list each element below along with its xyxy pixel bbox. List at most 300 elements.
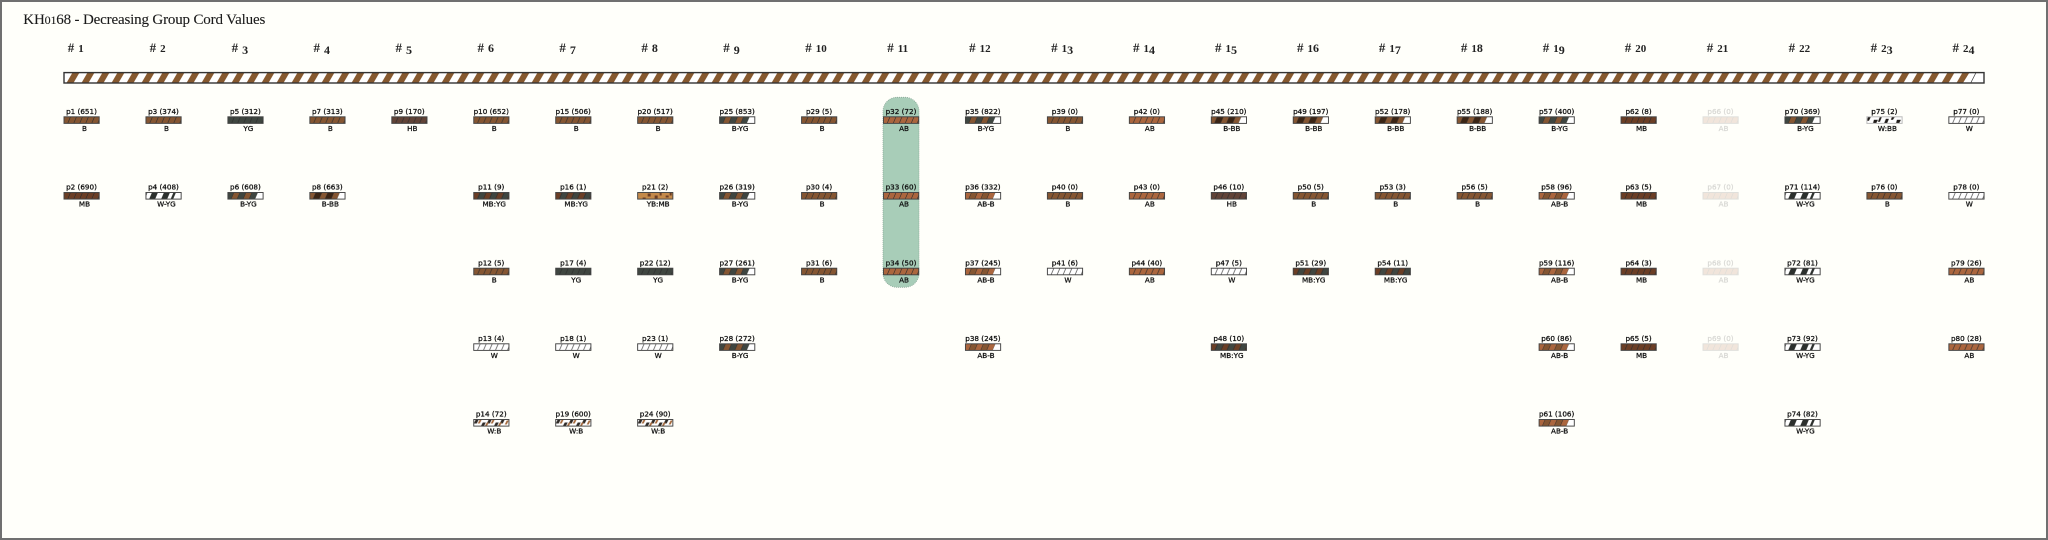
cord p51: p51 (29) xyxy=(1295,258,1326,267)
cord p51: MB:YG xyxy=(1302,275,1326,284)
cord p32: p32 (72) xyxy=(886,107,917,116)
cord p72: p72 (81) xyxy=(1787,258,1818,267)
cord p64 xyxy=(1621,258,1656,284)
cord p1: p1 (651) xyxy=(66,107,97,116)
cord p67: AB xyxy=(1719,200,1728,209)
cord p26 xyxy=(719,183,755,209)
cord p13: p13 (4) xyxy=(478,334,505,343)
cord p79: AB xyxy=(1964,275,1974,284)
cord p9 xyxy=(392,107,427,133)
cord p27 xyxy=(719,258,755,284)
cord p68: AB xyxy=(1719,275,1728,284)
cord p67: p67 (0) xyxy=(1707,183,1734,192)
cord p65: MB xyxy=(1636,351,1647,360)
cord p30 xyxy=(802,183,837,209)
column 6 cords xyxy=(474,107,509,436)
column 21 cords (faded) xyxy=(1703,107,1738,360)
cord p4: W-YG xyxy=(157,200,176,209)
cord p47: p47 (5) xyxy=(1216,258,1242,267)
cord p22: YG xyxy=(652,275,663,284)
cord p43: p43 (0) xyxy=(1134,183,1160,192)
cord p53: p53 (3) xyxy=(1380,183,1406,192)
heading 24: # 2 xyxy=(1953,40,1969,55)
cord p43: AB xyxy=(1145,200,1155,209)
cord p6: B-YG xyxy=(240,200,257,209)
heading 3: # xyxy=(232,40,238,55)
cord p62 xyxy=(1621,107,1656,133)
cord p41: W xyxy=(1064,275,1071,284)
cord p22: p22 (12) xyxy=(640,258,671,267)
cord p46: HB xyxy=(1227,200,1237,209)
cord p70: B-YG xyxy=(1797,124,1814,133)
heading 5: 5 xyxy=(406,43,412,57)
cord p58: p58 (96) xyxy=(1541,183,1572,192)
cord p23: p23 (1) xyxy=(642,334,668,343)
heading 14: 4 xyxy=(1149,43,1155,57)
cord p62: MB xyxy=(1636,124,1647,133)
cord p58: AB-B xyxy=(1551,200,1568,209)
heading 13: 3 xyxy=(1067,43,1073,57)
heading 3: 3 xyxy=(242,43,248,57)
cord p67 xyxy=(1703,183,1738,209)
heading 6: # 6 xyxy=(477,40,494,55)
cord p45: B-BB xyxy=(1223,124,1240,133)
cord p19 xyxy=(556,410,591,436)
cord p73 xyxy=(1785,334,1820,360)
cord p10: p10 (652) xyxy=(474,107,509,116)
column 20 cords xyxy=(1621,107,1656,360)
cord p27: p27 (261) xyxy=(719,258,755,267)
cord p15: p15 (506) xyxy=(556,107,591,116)
column 24 cords xyxy=(1949,107,1984,360)
cord p14 xyxy=(474,410,509,436)
cord p24: W:B xyxy=(651,427,665,436)
cord p42 xyxy=(1129,107,1165,133)
cord p57: B-YG xyxy=(1551,124,1568,133)
cord p44 xyxy=(1129,258,1165,284)
cord p77: p77 (0) xyxy=(1953,107,1980,116)
cord p71 xyxy=(1785,183,1820,209)
heading 7: 7 xyxy=(570,43,576,57)
cord p8 xyxy=(310,183,345,209)
heading 23: # 2 xyxy=(1871,40,1887,55)
cord p5: YG xyxy=(242,124,253,133)
cord p57 xyxy=(1539,107,1574,133)
column 13 cords xyxy=(1047,107,1083,284)
cord p55: p55 (188) xyxy=(1457,107,1493,116)
column 18 cords xyxy=(1457,107,1493,209)
heading 16: # 16 xyxy=(1297,40,1319,55)
cord p24 xyxy=(638,410,673,436)
cord p53 xyxy=(1375,183,1410,209)
cord p2: p2 (690) xyxy=(66,183,97,192)
title: KH0168 - Decreasing Group Cord Values xyxy=(23,12,265,28)
heading 23: 3 xyxy=(1887,43,1893,57)
cord p46 xyxy=(1211,183,1246,209)
heading 15: # 1 xyxy=(1215,40,1231,55)
cord p50: B xyxy=(1311,200,1316,209)
cord p26: p26 (319) xyxy=(719,183,755,192)
cord p25: B-YG xyxy=(732,124,748,133)
cord p53: B xyxy=(1393,200,1398,209)
cord p38 xyxy=(965,334,1001,360)
cord p60: AB-B xyxy=(1551,351,1568,360)
cord p44: p44 (40) xyxy=(1131,258,1162,267)
cord p8: B-BB xyxy=(322,200,339,209)
cord p79: p79 (26) xyxy=(1951,258,1982,267)
cord p8: p8 (663) xyxy=(312,183,343,192)
cord p12: B xyxy=(492,275,497,284)
cord p23 xyxy=(638,334,673,360)
cord p4: p4 (408) xyxy=(148,183,179,192)
cord p21 xyxy=(638,183,673,209)
cord p11: p11 (9) xyxy=(478,183,505,192)
cord p33: p33 (60) xyxy=(886,183,917,192)
heading 9: # xyxy=(723,40,730,55)
cord p11 xyxy=(474,183,509,209)
cord p41 xyxy=(1047,258,1083,284)
cord p27: B-YG xyxy=(732,275,748,284)
cord p54 xyxy=(1375,258,1410,284)
cord p16: MB:YG xyxy=(564,200,588,209)
cord p76: B xyxy=(1885,200,1890,209)
cord p36 xyxy=(965,183,1001,209)
cord p65: p65 (5) xyxy=(1625,334,1652,343)
heading 5: # xyxy=(396,40,402,55)
cord p68 xyxy=(1703,258,1738,284)
cord p16 xyxy=(556,183,591,209)
cord p63: MB xyxy=(1636,200,1647,209)
heading 4: # xyxy=(314,40,320,55)
column 4 cords xyxy=(310,107,345,209)
cord p29: B xyxy=(820,124,825,133)
cord p18 xyxy=(556,334,591,360)
column 7 cords xyxy=(556,107,591,436)
cord p73: W-YG xyxy=(1796,351,1815,360)
cord p37: p37 (245) xyxy=(965,258,1001,267)
cord p11: MB:YG xyxy=(482,200,506,209)
cord p59: AB-B xyxy=(1551,275,1568,284)
cord p80: AB xyxy=(1964,351,1974,360)
cord p33 xyxy=(884,183,919,209)
cord p36: p36 (332) xyxy=(965,183,1001,192)
cord p24: p24 (90) xyxy=(640,410,671,419)
cord p20: p20 (517) xyxy=(637,107,673,116)
cord p36: AB-B xyxy=(977,200,995,209)
cord p63 xyxy=(1621,183,1656,209)
heading 11: # 11 xyxy=(887,40,908,55)
cord p18: p18 (1) xyxy=(560,334,586,343)
heading 7: # xyxy=(559,40,566,55)
cord p14: p14 (72) xyxy=(476,410,507,419)
cord p75 xyxy=(1867,107,1902,133)
cord p50 xyxy=(1293,183,1328,209)
cord p13: W xyxy=(491,351,498,360)
cord p65 xyxy=(1621,334,1656,360)
cord p78: p78 (0) xyxy=(1953,183,1980,192)
cord p60: p60 (86) xyxy=(1541,334,1572,343)
cord p80: p80 (28) xyxy=(1951,334,1982,343)
cord p25 xyxy=(719,107,755,133)
cord p73: p73 (92) xyxy=(1787,334,1818,343)
cord p39 xyxy=(1047,107,1083,133)
cord p7: B xyxy=(328,124,333,133)
cord p29 xyxy=(802,107,837,133)
cord p39: B xyxy=(1065,124,1070,133)
cord p64: MB xyxy=(1636,275,1647,284)
heading 13: # 1 xyxy=(1051,40,1067,55)
cord p13 xyxy=(474,334,509,360)
cord p17: p17 (4) xyxy=(560,258,586,267)
cord p59: p59 (116) xyxy=(1539,258,1574,267)
cord p22 xyxy=(638,258,673,284)
heading 1: # 1 xyxy=(68,40,84,55)
cord p18: W xyxy=(573,351,580,360)
cord p70 xyxy=(1785,107,1820,133)
cord p35 xyxy=(965,107,1001,133)
cord p49: p49 (197) xyxy=(1293,107,1329,116)
cord p14: W:B xyxy=(487,427,501,436)
cord p79 xyxy=(1949,258,1984,284)
cord p12: p12 (5) xyxy=(478,258,505,267)
cord p29: p29 (5) xyxy=(806,107,832,116)
column headings xyxy=(68,40,1975,57)
heading 18: # 18 xyxy=(1461,40,1483,55)
cord p59 xyxy=(1539,258,1574,284)
cord p51 xyxy=(1293,258,1328,284)
cord p34 xyxy=(884,258,919,284)
cord p52: B-BB xyxy=(1387,124,1404,133)
cord p15 xyxy=(556,107,591,133)
heading 8: # 8 xyxy=(641,40,658,55)
cord p42: AB xyxy=(1145,124,1155,133)
cord p35: p35 (822) xyxy=(965,107,1001,116)
cord p76: p76 (0) xyxy=(1871,183,1898,192)
cord p77 xyxy=(1949,107,1984,133)
cord p62: p62 (8) xyxy=(1625,107,1652,116)
cord p34: p34 (50) xyxy=(886,258,917,267)
cord p7: p7 (313) xyxy=(312,107,343,116)
cord p66 xyxy=(1703,107,1738,133)
cord p75: p75 (2) xyxy=(1871,107,1898,116)
cord p10: B xyxy=(492,124,497,133)
cord p68: p68 (0) xyxy=(1707,258,1734,267)
cord p48 xyxy=(1211,334,1246,360)
cord p80 xyxy=(1949,334,1984,360)
cord p34: AB xyxy=(899,275,909,284)
column 1 cords xyxy=(64,107,99,209)
cord p48: p48 (10) xyxy=(1213,334,1244,343)
cord p56 xyxy=(1457,183,1492,209)
cord p61 xyxy=(1539,410,1574,436)
cord p45: p45 (210) xyxy=(1211,107,1247,116)
column 9 cords xyxy=(719,107,755,360)
cord p56: B xyxy=(1475,200,1480,209)
heading 17: 7 xyxy=(1395,43,1401,57)
cord p30: p30 (4) xyxy=(806,183,832,192)
column 17 cords xyxy=(1375,107,1411,284)
cord p74: W-YG xyxy=(1796,427,1815,436)
cord p5 xyxy=(228,107,263,133)
heading 19: 9 xyxy=(1559,43,1565,57)
cord p74: p74 (82) xyxy=(1787,410,1818,419)
cord p40 xyxy=(1047,183,1083,209)
cord p40: B xyxy=(1065,200,1070,209)
cord p32 xyxy=(884,107,919,133)
cord p19: p19 (600) xyxy=(556,410,591,419)
cord p54: MB:YG xyxy=(1384,275,1407,284)
cord p3: B xyxy=(164,124,169,133)
column 8 cords xyxy=(637,107,673,436)
cord p28 xyxy=(719,334,755,360)
heading 22: # 22 xyxy=(1789,40,1811,55)
cord p31: p31 (6) xyxy=(806,258,832,267)
cord p12 xyxy=(474,258,509,284)
cord p1: B xyxy=(82,124,87,133)
cord p30: B xyxy=(820,200,825,209)
cord p48: MB:YG xyxy=(1220,351,1244,360)
column 11 cords xyxy=(884,107,919,284)
cord p66: AB xyxy=(1719,124,1728,133)
cord p54: p54 (11) xyxy=(1377,258,1408,267)
cord p28: B-YG xyxy=(732,351,748,360)
cord p61: p61 (106) xyxy=(1539,410,1574,419)
heading 20: # 20 xyxy=(1625,40,1647,55)
cord p21: p21 (2) xyxy=(642,183,668,192)
cord p72: W-YG xyxy=(1796,275,1815,284)
heading 2: # 2 xyxy=(150,40,166,55)
cord p31 xyxy=(802,258,837,284)
cord p2 xyxy=(64,183,99,209)
cord p77: W xyxy=(1966,124,1973,133)
cord p78: W xyxy=(1966,200,1973,209)
cord p52: p52 (178) xyxy=(1375,107,1411,116)
cord p69: AB xyxy=(1719,351,1728,360)
cord p4 xyxy=(146,183,181,209)
column 5 cords xyxy=(392,107,427,133)
heading 4: 4 xyxy=(324,43,330,57)
cord p55: B-BB xyxy=(1469,124,1486,133)
cord p56: p56 (5) xyxy=(1462,183,1488,192)
cord p9: p9 (170) xyxy=(394,107,425,116)
cord p64: p64 (3) xyxy=(1625,258,1652,267)
column 12 cords xyxy=(965,107,1001,360)
cord p49: B-BB xyxy=(1305,124,1322,133)
heading 14: # 1 xyxy=(1133,40,1149,55)
cord p47: W xyxy=(1228,275,1235,284)
cord p1 xyxy=(64,107,99,133)
cord p44: AB xyxy=(1145,275,1155,284)
main cord bar xyxy=(64,73,1984,83)
cord p35: B-YG xyxy=(978,124,994,133)
column 22 cords xyxy=(1785,107,1820,436)
cord p32: AB xyxy=(899,124,909,133)
cord p20: B xyxy=(656,124,661,133)
heading 24: 4 xyxy=(1969,43,1975,57)
cord p17 xyxy=(556,258,591,284)
cord p57: p57 (400) xyxy=(1539,107,1574,116)
cord p20 xyxy=(637,107,673,133)
cord p37 xyxy=(965,258,1001,284)
cord p23: W xyxy=(655,351,662,360)
heading 21: # 21 xyxy=(1707,40,1728,55)
cord p46: p46 (10) xyxy=(1213,183,1244,192)
cord p19: W:B xyxy=(569,427,583,436)
cord p10 xyxy=(474,107,509,133)
cord p38: p38 (245) xyxy=(965,334,1001,343)
cord p2: MB xyxy=(79,200,90,209)
heading 9: 9 xyxy=(734,43,740,57)
cord p31: B xyxy=(820,275,825,284)
cord p3 xyxy=(146,107,181,133)
cord p74 xyxy=(1785,410,1820,436)
heading 10: # 10 xyxy=(805,40,827,55)
cord p42: p42 (0) xyxy=(1134,107,1160,116)
cord p28: p28 (272) xyxy=(719,334,755,343)
cord p69 xyxy=(1703,334,1738,360)
cord p3: p3 (374) xyxy=(148,107,179,116)
heading 15: 5 xyxy=(1231,43,1237,57)
column 15 cords xyxy=(1211,107,1247,360)
cord p9: HB xyxy=(407,124,418,133)
heading 12: # 12 xyxy=(969,40,991,55)
column 16 cords xyxy=(1293,107,1329,284)
cord p43 xyxy=(1129,183,1165,209)
cord p71: W-YG xyxy=(1796,200,1815,209)
cord p70: p70 (369) xyxy=(1785,107,1820,116)
cord p69: p69 (0) xyxy=(1707,334,1734,343)
cord p15: B xyxy=(574,124,579,133)
cord p50: p50 (5) xyxy=(1298,183,1324,192)
cord p40: p40 (0) xyxy=(1052,183,1078,192)
cord p39: p39 (0) xyxy=(1052,107,1078,116)
cord p75: W:BB xyxy=(1878,124,1897,133)
column 23 cords xyxy=(1867,107,1902,209)
cord p7 xyxy=(310,107,345,133)
cord p16: p16 (1) xyxy=(560,183,586,192)
cord p47 xyxy=(1211,258,1246,284)
cord p66: p66 (0) xyxy=(1707,107,1734,116)
cord p6: p6 (608) xyxy=(230,183,261,192)
cord p76 xyxy=(1867,183,1902,209)
column 14 cords xyxy=(1129,107,1165,284)
cord p55 xyxy=(1457,107,1493,133)
highlight: column 11 group xyxy=(883,97,919,287)
cord p41: p41 (6) xyxy=(1052,258,1078,267)
cord p21: YB:MB xyxy=(646,200,670,209)
column 19 cords xyxy=(1539,107,1574,436)
cord p6 xyxy=(228,183,263,209)
cord p26: B-YG xyxy=(732,200,748,209)
column 3 cords xyxy=(228,107,263,209)
cord p49 xyxy=(1293,107,1329,133)
cord p37: AB-B xyxy=(977,275,995,284)
cord p78 xyxy=(1949,183,1984,209)
cord p52 xyxy=(1375,107,1411,133)
cord p25: p25 (853) xyxy=(719,107,755,116)
cord p5: p5 (312) xyxy=(230,107,261,116)
column 10 cords xyxy=(802,107,837,284)
cord p60 xyxy=(1539,334,1574,360)
cord p63: p63 (5) xyxy=(1625,183,1652,192)
heading 17: # 1 xyxy=(1379,40,1395,55)
cord p58 xyxy=(1539,183,1574,209)
heading 19: # 1 xyxy=(1543,40,1559,55)
cord p71: p71 (114) xyxy=(1785,183,1820,192)
cord p61: AB-B xyxy=(1551,427,1568,436)
cord p33: AB xyxy=(899,200,909,209)
cord p72 xyxy=(1785,258,1820,284)
